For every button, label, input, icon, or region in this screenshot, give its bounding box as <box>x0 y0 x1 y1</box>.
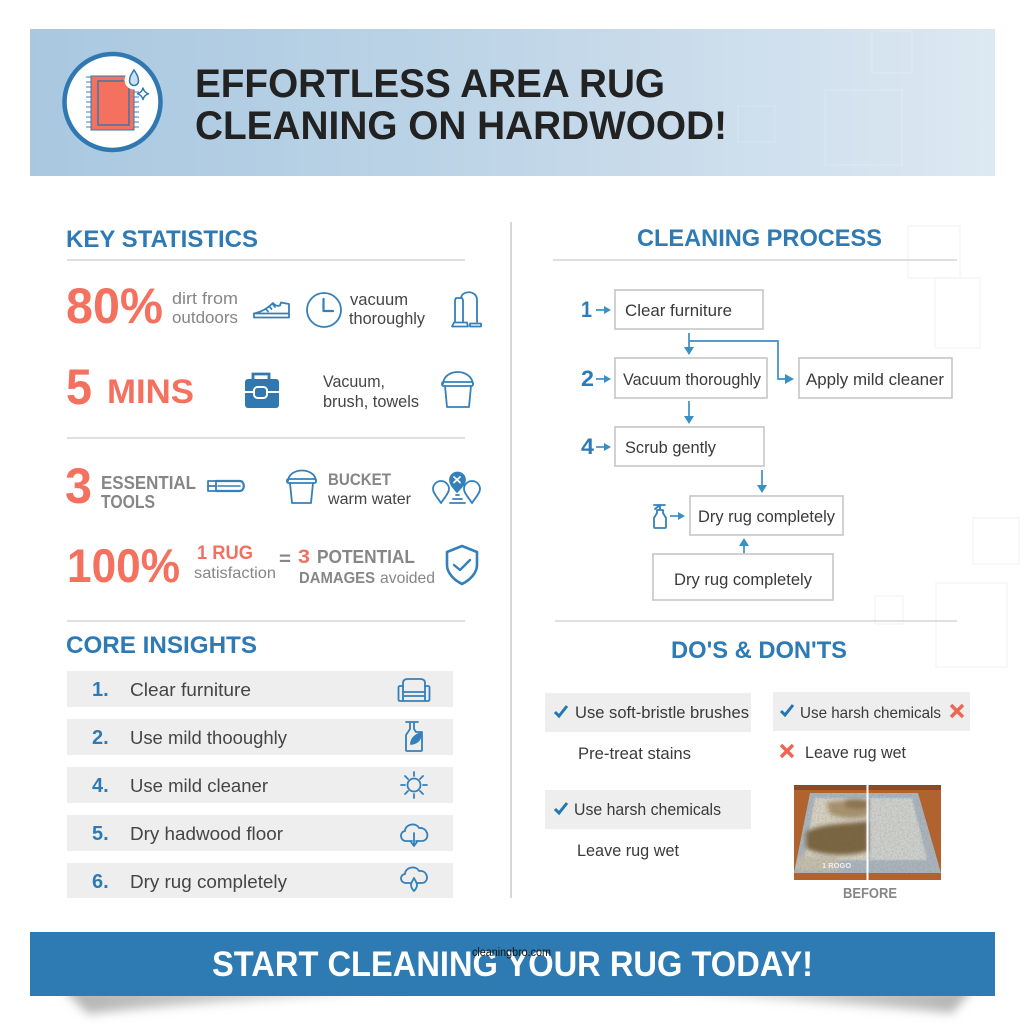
do: use harsh chemicals: Use harsh chemicals <box>574 801 721 819</box>
text: pre-treat stains: Pre-treat stains <box>578 745 691 763</box>
core insight 6: 6. <box>92 871 109 893</box>
do: soft-bristle brushes: Use soft-bristle brushes <box>575 704 749 722</box>
step number 1 <box>581 297 611 322</box>
step number 2 <box>581 366 611 391</box>
banner shadow <box>62 988 974 1014</box>
step number 1: 1 <box>581 297 592 322</box>
text: vacuum, brush, towels <box>323 373 419 411</box>
stat: 80% dirt from outdoors: dirt from <box>172 289 238 308</box>
photo: rug before and after: 1 ROGO <box>822 861 851 870</box>
core insight 5 <box>67 815 453 851</box>
icon: vacuum <box>452 292 481 326</box>
box: dry rug completely second: Dry rug completely <box>674 570 812 589</box>
stat: 100% satisfaction: 1 RUG <box>197 543 253 564</box>
stat: 3 potential damages avoided: avoided <box>380 570 435 587</box>
stat: 80% dirt from outdoors <box>66 278 289 334</box>
icon: pins <box>433 472 480 503</box>
box: scrub gently: Scrub gently <box>625 438 716 457</box>
arrow: to scrub <box>684 401 694 424</box>
box: scrub gently <box>615 427 764 466</box>
photo: rug before and after <box>794 785 941 880</box>
arrow: up to dry rug <box>739 538 749 554</box>
box: clear furniture <box>615 290 763 329</box>
stat: 80% dirt from outdoors: outdoors <box>172 308 238 327</box>
core insight 1: 1. <box>92 679 109 701</box>
label: before: BEFORE <box>843 886 897 902</box>
text: vacuum, brush, towels: brush, towels <box>323 393 419 411</box>
icon: cloud with drop <box>401 867 427 891</box>
core insight 2: 2. <box>92 727 109 749</box>
text: bucket warm water <box>327 471 411 508</box>
stat: clock vacuum thoroughly: thoroughly <box>349 310 426 328</box>
stat: 3 potential damages avoided <box>279 546 435 587</box>
icon: shield <box>447 546 477 584</box>
heading: do's and don'ts: DO'S & DON'TS <box>671 637 847 664</box>
box: dry rug completely <box>690 496 843 535</box>
text: vacuum, brush, towels: Vacuum, <box>323 373 385 391</box>
stat: 3 potential damages avoided: = <box>279 549 291 570</box>
don't: use harsh chemicals: Use harsh chemicals <box>800 705 941 722</box>
icon: brush tool <box>208 481 244 491</box>
flowchart: cleaning process <box>581 290 952 600</box>
do: use harsh chemicals <box>545 790 751 829</box>
stat: clock vacuum thoroughly <box>307 291 481 328</box>
stat: 100% satisfaction: satisfaction <box>194 565 276 582</box>
text: bucket warm water: warm water <box>327 491 411 508</box>
core insight 6: Dry rug completely <box>130 871 288 892</box>
heading: key statistics: KEY STATISTICS <box>66 226 258 253</box>
icon: cloud <box>401 824 427 846</box>
arrow: branch from clear furniture <box>684 333 794 384</box>
core insight 5: 5. <box>92 823 109 845</box>
call to action banner: START CLEANING YOUR RUG TODAY! <box>212 945 813 984</box>
stat: 5 mins: 5 <box>66 359 92 415</box>
core insight 1 <box>67 671 453 707</box>
stat: 5 mins: MINS <box>107 373 194 411</box>
stat: 80% dirt from outdoors: 80% <box>66 278 163 334</box>
arrow: to dry rug <box>757 470 767 493</box>
box: dry rug completely second <box>653 554 833 600</box>
stat: 3 potential damages avoided: DAMAGES <box>299 570 375 587</box>
stat: 3 essential tools: ESSENTIAL <box>101 472 196 493</box>
core insight 1: Clear furniture <box>130 679 251 700</box>
don't: use harsh chemicals <box>773 692 970 731</box>
box: apply mild cleaner <box>799 358 952 398</box>
icon: clock <box>307 293 341 327</box>
core insight 4: 4. <box>92 775 109 797</box>
box: apply mild cleaner: Apply mild cleaner <box>806 370 944 389</box>
step number 2: 2 <box>581 366 594 391</box>
title <box>195 62 727 148</box>
box: clear furniture: Clear furniture <box>625 301 732 320</box>
title: EFFORTLESS AREA RUG <box>195 62 665 106</box>
icon: spray bottle with leaf <box>406 722 422 751</box>
stat: 100% satisfaction <box>67 539 276 592</box>
icon: bucket small <box>287 470 316 503</box>
box: dry rug completely: Dry rug completely <box>698 507 835 526</box>
box: vacuum thoroughly <box>615 358 767 398</box>
text: leave rug wet: Leave rug wet <box>577 842 679 860</box>
stat: clock vacuum thoroughly: vacuum <box>350 291 408 309</box>
title: CLEANING ON HARDWOOD! <box>195 104 727 148</box>
core insight 5: Dry hadwood floor <box>130 823 283 844</box>
stat: 100% satisfaction: 100% <box>67 539 180 592</box>
stat: 3 essential tools: TOOLS <box>101 491 155 512</box>
call to action banner <box>30 932 995 996</box>
step number 4: 4 <box>581 434 595 459</box>
heading: cleaning process: CLEANING PROCESS <box>637 225 882 252</box>
stat: 3 essential tools: 3 <box>65 458 92 514</box>
stat: 3 potential damages avoided: POTENTIAL <box>317 546 415 567</box>
core insight 2 <box>67 719 453 755</box>
heading: core insights: CORE INSIGHTS <box>66 632 257 659</box>
core insight 2: Use mild thooughly <box>130 727 288 748</box>
core insight 6 <box>67 863 453 898</box>
icon: spray bottle <box>654 505 666 528</box>
icon: sofa <box>398 679 430 701</box>
arrow: spray to box <box>670 512 685 520</box>
don't: leave rug wet: Leave rug wet <box>805 744 906 762</box>
text: bucket warm water: BUCKET <box>328 471 391 489</box>
box: vacuum thoroughly: Vacuum thoroughly <box>623 370 761 389</box>
do: soft-bristle brushes <box>545 693 751 732</box>
core insight 4: Use mild cleaner <box>130 775 268 796</box>
icon: rug with water drop <box>64 54 160 150</box>
stat: 5 mins <box>66 359 194 415</box>
icon: toolbox <box>245 374 279 408</box>
stat: 3 potential damages avoided: 3 <box>298 547 310 568</box>
icon: sun <box>401 772 427 798</box>
icon: shoe <box>254 302 289 318</box>
watermark: cleaningbro.com <box>472 947 551 959</box>
step number 4 <box>581 434 611 459</box>
icon: bucket <box>442 372 473 407</box>
header banner <box>30 29 995 176</box>
stat: 3 essential tools <box>65 458 244 514</box>
core insight 4 <box>67 767 453 803</box>
